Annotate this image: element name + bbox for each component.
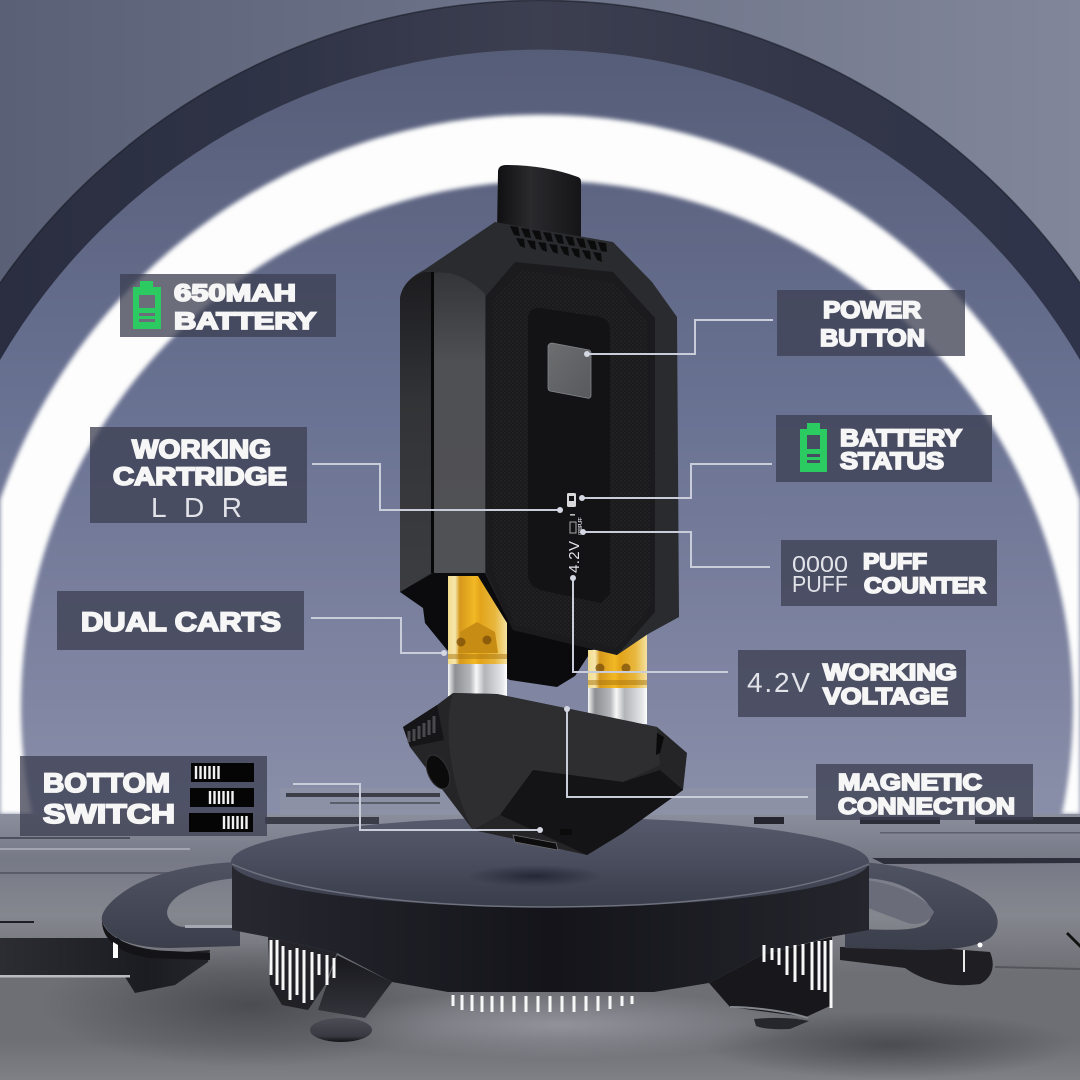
label: battery status: STATUS <box>840 448 944 475</box>
label: dual carts: DUAL CARTS <box>81 607 281 637</box>
label: magnetic connection: CONNECTION <box>838 793 1015 819</box>
label: power button <box>777 290 965 356</box>
label: 650mAh battery: 650MAH <box>174 280 296 307</box>
label: power button: BUTTON <box>820 325 925 352</box>
label: puff counter: PUFF <box>863 549 927 574</box>
callout lines and dots <box>293 320 808 833</box>
label: battery status <box>776 415 992 482</box>
label: working cartridge: WORKING <box>132 434 271 464</box>
device: screen readout <box>566 493 584 573</box>
label: puff counter: COUNTER <box>864 573 986 598</box>
label: puff counter: PUFF <box>792 571 848 597</box>
platform: left ear <box>0 862 240 993</box>
label: bottom switch: SWITCH <box>43 799 175 829</box>
label: puff counter <box>781 540 997 606</box>
label: dual carts <box>57 591 304 650</box>
label: 650mAh battery: BATTERY <box>174 308 316 335</box>
platform: glitch stripes <box>268 937 831 1012</box>
device: mouthpiece <box>497 165 581 250</box>
label: bottom switch: BOTTOM <box>43 768 170 798</box>
device: main body <box>400 222 679 655</box>
label: 650mAh battery <box>120 274 336 337</box>
device: power button <box>548 343 591 398</box>
label: magnetic connection <box>816 764 1033 820</box>
device: screen readout: 0000 PUFF <box>578 517 584 535</box>
device: under shell <box>400 560 678 687</box>
device: bottom magnetic base <box>403 693 687 855</box>
label: working voltage: WORKING <box>823 659 957 685</box>
label: magnetic connection: MAGNETIC <box>838 769 982 795</box>
device: cartridges <box>448 576 647 724</box>
label: battery status: BATTERY <box>840 425 962 452</box>
label: working voltage: 4.2V <box>747 667 810 698</box>
label: working voltage <box>738 650 966 717</box>
label: puff counter: 0000 <box>792 551 848 577</box>
platform: round base <box>231 817 869 992</box>
label: working voltage: VOLTAGE <box>823 683 948 709</box>
label: power button: POWER <box>823 297 921 324</box>
label: working cartridge <box>90 427 307 523</box>
floor with panel details <box>0 788 1080 1080</box>
label: working cartridge: CARTRIDGE <box>113 463 287 491</box>
platform: feet <box>310 937 832 1042</box>
device: screen readout: 4.2V <box>566 541 583 573</box>
platform: right ear <box>840 862 998 985</box>
label: bottom switch <box>20 756 267 836</box>
label: working cartridge: LDR <box>151 492 242 523</box>
